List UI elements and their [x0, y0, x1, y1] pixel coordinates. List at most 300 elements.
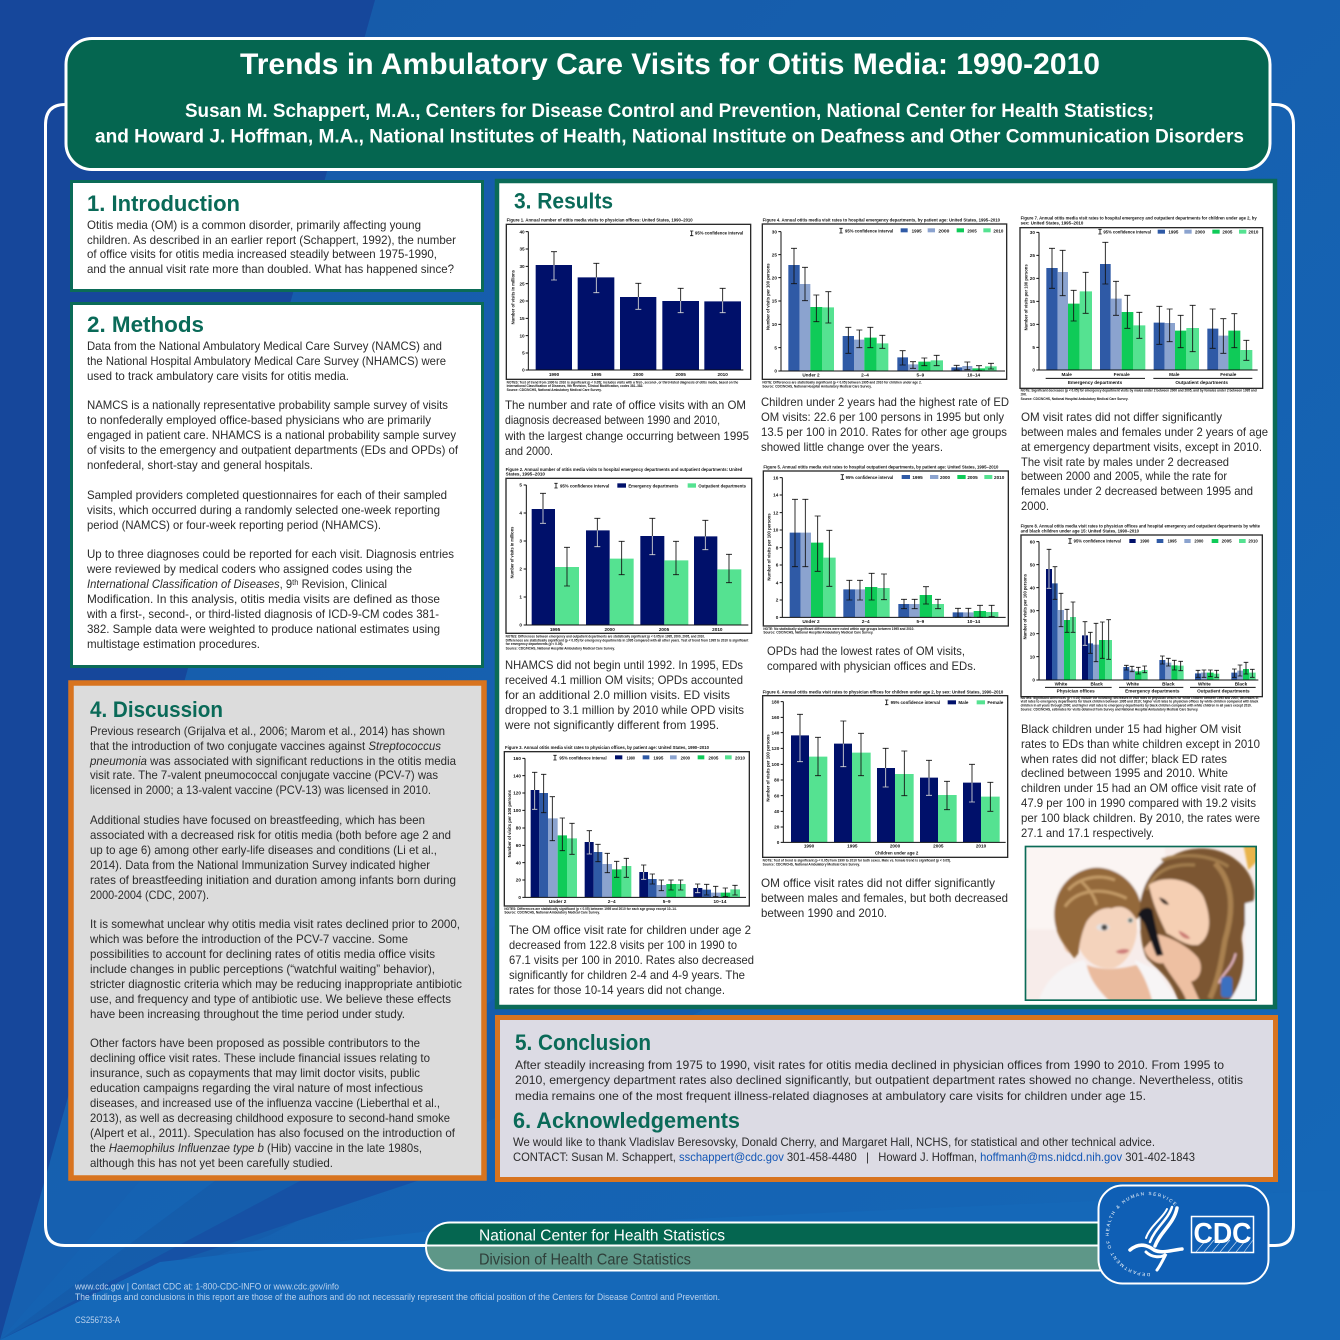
figure 8: rates by race and setting chart: White [1198, 681, 1211, 686]
panel: methods [72, 304, 482, 666]
text: discussion body: Previous research (Grijalva et al., 2006; Marom et al., 2014) has shown [90, 724, 445, 738]
text: figure 2 finding: were not significantly different from 1995. [504, 718, 719, 732]
figure 7: ED and OPD rates under 2 by sex chart: Number of visits per 100 persons [1023, 264, 1028, 330]
text: figure 7 finding: 2000. [1021, 499, 1049, 513]
figure 6: physician office rates by sex chart: Number of visits per 100 persons [766, 734, 771, 802]
figure 8: rates by race and setting chart: Outpatient departments [1197, 689, 1250, 694]
figure 2: ED and OPD visits bar chart [506, 467, 752, 650]
figure 4: emergency department rates by age chart: 0 [774, 369, 777, 374]
figure 7: ED and OPD rates under 2 by sex chart: Outpatient departments [1175, 380, 1228, 385]
text: figure 1 finding: The number and rate of office visits with an OM [505, 398, 746, 412]
figure 7: ED and OPD rates under 2 by sex chart: 30 [1030, 230, 1035, 235]
text: conclusion body [515, 1058, 1243, 1103]
figure 8: rates by race and setting chart: 0 [1032, 678, 1035, 683]
figure 6: physician office rates by sex chart: 20 [774, 825, 780, 830]
figure 5: outpatient department rates by age chart: 2 [776, 598, 779, 603]
figure 3: physician office rates by age chart: Under 2 [549, 899, 567, 904]
heading: conclusion: 5. Conclusion [515, 1030, 651, 1055]
figure 6: physician office rates by sex chart: 95% confidence interval [891, 700, 940, 705]
text: discussion body: diseases, and increased use of the influenza vaccine (Lieberthal et al., [90, 1096, 440, 1110]
text: discussion body: insurance, such as copayments that may limit doctor visits, public [90, 1066, 420, 1080]
figure 1: office visits bar chart: 2010 [717, 372, 728, 377]
footer text: www.cdc.gov | Contact CDC at: 1-800-CDC-INFO or www.cdc.gov/info [74, 1282, 339, 1292]
text: figure 5 finding: compared with physician offices and EDs. [767, 659, 976, 673]
text: figure 7 finding: females under 2 decreased between 1995 and [1021, 484, 1253, 498]
text: discussion body: use, and frequency and type of antibiotic use. We believe these effects [90, 992, 451, 1006]
figure 6: physician office rates by sex chart: 80 [774, 778, 780, 783]
figure 3: physician office rates by age chart: 40 [516, 860, 521, 865]
text: discussion body: rates of breastfeeding initiation and duration among infants born during [90, 873, 456, 887]
figure 6: physician office rates by sex chart: Children under age 2 [875, 851, 919, 856]
text: figure 2 finding: for an additional 2.0 million visits. ED visits [505, 688, 730, 702]
icon: HHS seal: DEPARTMENT OF HEALTH & HUMAN SERVICES USA [1106, 1192, 1177, 1276]
figure 7: ED and OPD rates under 2 by sex chart: Source: CDC/NCHS, National Hospital Ambulatory Medical Care Survey. [1021, 397, 1129, 401]
text: methods body: NAMCS is a nationally representative probability sample survey of visits [87, 398, 448, 412]
figure 7: ED and OPD rates under 2 by sex chart: 2000. [1021, 392, 1027, 396]
text: methods body: Up to three diagnoses could be reported for each visit. Diagnosis entries [87, 547, 454, 561]
text: methods body: with a first-, second-, or third-listed diagnosis of ICD-9-CM codes 381- [86, 607, 439, 621]
text: discussion body [89, 724, 462, 1170]
figure 1: office visits bar chart: 0 [522, 368, 525, 373]
figure 2: ED and OPD visits bar chart: 2000 [604, 627, 615, 632]
figure 7: ED and OPD rates under 2 by sex chart: NOTE: Significant decreases (p < 0.05) for emergency department visits by males under 2 between 2000 and 2005, and by females under 2 between 1995 and [1021, 389, 1257, 393]
figure 1: office visits bar chart: 5 [522, 351, 525, 356]
figure 8: rates by race and setting chart: 95% confidence interval [1074, 539, 1121, 544]
text: methods body: Revision, Clinical [298, 577, 387, 591]
figure 2: ED and OPD visits bar chart: States, 1995–2010 [506, 472, 545, 477]
text: methods body: Sampled providers completed questionnaires for each of their sampled [87, 488, 447, 502]
outer white outline [46, 104, 1294, 1246]
text: methods body: Modification. In this analysis, otitis media visits are defined as those [87, 592, 440, 606]
text: figure 8 finding [1020, 722, 1260, 840]
figure 3: physician office rates by age chart: 10–14 [714, 899, 727, 904]
text: introduction body: Otitis media (OM) is a common disorder, primarily affecting young [87, 218, 421, 232]
authors: and Howard J. Hoffman, M.A., National Institutes of Health, National Institute on Deafness and Other Communication Disorders [95, 126, 1244, 148]
text: figure 3 finding: significantly for children 2-4 and 4-9 years. The [509, 968, 745, 982]
figure 5: outpatient department rates by age chart: 14 [773, 493, 779, 498]
text: methods body: visits, which occurred during a randomly selected one-week reporting [87, 503, 440, 517]
text: methods body: 382. Sample data were weighted to produce national estimates using [87, 622, 440, 636]
figure 8: rates by race and setting chart: Figure 8. Annual otitis media visit rates to physician offices and hospital emergency and outpatient departments by white [1021, 524, 1260, 529]
figure 2: ED and OPD visits bar chart: Number of visits in millions [509, 526, 514, 578]
authors [95, 100, 1244, 148]
text: conclusion body: After steadily increasing from 1975 to 1990, visit rates for otitis media declined in physician offices from 1990 to 2010. From 1995 to [515, 1058, 1224, 1072]
text: discussion body: education campaigns regarding the viral nature of most infectious [90, 1081, 423, 1095]
text: figure 8 finding: rates to EDs than white children except in 2010 [1021, 737, 1260, 751]
figure 7: ED and OPD rates under 2 by sex chart: 95% confidence interval [1103, 230, 1151, 235]
figure 5: outpatient department rates by age chart: Figure 5. Annual otitis media visit rates to hospital outpatient departments, by patient age: United States, 1995–2010 [763, 465, 999, 470]
figure 3: physician office rates by age chart: 140 [513, 773, 521, 778]
text: figure 6 finding: between males and females, but both decreased [761, 891, 1008, 905]
text: methods body: to nonfederally employed office-based physicians who are primarily [87, 413, 431, 427]
text: figure 7 finding: The visit rate by males under 2 decreased [1021, 455, 1229, 469]
figure 6: physician office rates by sex chart: 120 [772, 746, 780, 751]
figure 1: office visits bar chart: 25 [519, 281, 525, 286]
figure 4: emergency department rates by age chart: 20 [772, 275, 777, 280]
figure 4: emergency department rates by age chart: 1995 [912, 228, 922, 233]
figure 1: office visits bar chart: International Classification of Diseases, 9th Revision, Clinical Modification, codes 381–382. [507, 384, 643, 388]
figure 8: rates by race and setting chart: 30 [1030, 608, 1035, 613]
figure 8: rates by race and setting chart: 2000 [1194, 539, 1204, 544]
figure 5: outpatient department rates by age chart: 12 [773, 510, 779, 515]
figure 8: rates by race and setting chart: Physician offices [1057, 689, 1095, 694]
figure 6: physician office rates by sex chart: Male [958, 700, 969, 705]
figure 3: physician office rates by age chart: Source: CDC/NCHS, National Ambulatory Medical Care Survey. [504, 911, 600, 915]
figure 1: office visits bar chart: 20 [519, 299, 525, 304]
text: conclusion body: media remains one of the most frequent illness-related diagnoses at ambulatory care visits for children under age 15. [515, 1089, 1146, 1103]
text: figure 1 finding [504, 398, 749, 458]
figure 8: rates by race and setting chart: 20 [1030, 631, 1035, 636]
text: methods body: engaged in patient care. NHAMCS is a national probability sample survey [87, 428, 456, 442]
header banner [66, 38, 1270, 170]
figure 3: physician office rates by age chart: 80 [516, 826, 521, 831]
figure 4: emergency department rates by age chart: 95% confidence interval [845, 228, 893, 233]
figure 8: rates by race and setting chart: White [1055, 681, 1068, 686]
figure 7: ED and OPD rates under 2 by sex chart: sex: United States, 1995–2010 [1021, 221, 1084, 226]
figure 6: physician office rates by sex chart: 40 [774, 809, 780, 814]
figure 5: outpatient department rates by age chart: 16 [773, 475, 779, 480]
text: methods body: period (NAMCS) or four-week reporting period (NHAMCS). [87, 518, 381, 532]
figure 8: rates by race and setting chart: and black children under age 15: United States, 1990–2010 [1021, 529, 1139, 534]
figure 5: outpatient department rates by age chart: Source: CDC/NCHS, National Hospital Ambulatory Medical Care Survey. [763, 631, 874, 635]
footer text: CS256733-A [75, 1315, 121, 1325]
figure 1: office visits bar chart: Number of visits in millions [511, 270, 516, 324]
figure 6: physician office rates by sex chart: Female [987, 700, 1004, 705]
figure 8: rates by race and setting chart [1021, 524, 1262, 712]
figure 6: physician office rates by sex chart: 100 [772, 762, 780, 767]
figure 3: physician office rates by age chart: 60 [516, 843, 521, 848]
text: figure 3 finding: 67.1 visits per 100 in 2010. Rates also decreased [509, 953, 754, 967]
figure 4: emergency department rates by age chart: 25 [772, 252, 777, 257]
figure 7: ED and OPD rates under 2 by sex chart: Female [1220, 372, 1237, 377]
panel: results [497, 181, 1275, 1007]
figure 5: outpatient department rates by age chart [763, 465, 1008, 635]
heading: discussion: 4. Discussion [90, 697, 223, 722]
text: discussion body: associated with a decreased risk for otitis media (both before age 2 and [90, 828, 451, 842]
figure 8: rates by race and setting chart: White [1126, 681, 1139, 686]
text: discussion body: It is somewhat unclear why otitis media visit rates declined prior to 2000, [90, 917, 460, 931]
figure 7: ED and OPD rates under 2 by sex chart: 0 [1032, 368, 1035, 373]
figure 3: physician office rates by age chart [504, 745, 749, 915]
figure 2: ED and OPD visits bar chart: 2010 [712, 627, 723, 632]
text: figure 2 finding [504, 658, 744, 732]
figure 8: rates by race and setting chart: Black [1090, 681, 1103, 686]
text: figure 4 finding [761, 395, 1009, 454]
figure 5: outpatient department rates by age chart: Number of visits per 100 persons [767, 513, 772, 581]
text: introduction body: and the annual visit rate more than doubled. What has happened since? [87, 262, 454, 276]
figure 3: physician office rates by age chart: 0 [518, 895, 521, 900]
figure 3: physician office rates by age chart: NOTES: Differences are statistically significant (p < 0.05) between 1995 and 2010 for each age group except 10–14. [504, 907, 677, 911]
figure 7: ED and OPD rates under 2 by sex chart: Female [1114, 372, 1130, 377]
panel: conclusion and acknowledgements [498, 1018, 1276, 1180]
text: figure 7 finding: OM visit rates did not differ significantly [1021, 410, 1222, 424]
figure 6: physician office rates by sex chart: 180 [772, 699, 780, 704]
figure 8: rates by race and setting chart: NOTES: Significant differences (p < 0.05) include the following: decreases in visit rates to physician offices for white children between 1995 and 2000; decreases in [1021, 696, 1258, 700]
text: discussion body: the Haemophilus Influenzae type b (Hib) vaccine in the late 1980s, [90, 1141, 422, 1155]
figure 8: rates by race and setting chart: 1990 [1140, 539, 1150, 544]
figure 4: emergency department rates by age chart: 2000 [938, 228, 950, 233]
text: methods body: multistage estimation procedures. [87, 637, 260, 651]
figure 5: outpatient department rates by age chart: 8 [776, 545, 779, 550]
text: acknowledgements and contact: CONTACT: Susan M. Schappert, sschappert@cdc.gov 301-458-4480 | Howard J. Hoffman, hoffmanh@ms.nidcd.nih.gov 301-402-1843 [513, 1150, 1195, 1164]
figure 2: ED and OPD visits bar chart: NOTES: Differences between emergency and outpatient departments are statistically significant (p < 0.05) in 1995, 2000, 2005, and 2010. [506, 635, 705, 639]
text: figure 2 finding: received 4.1 million OM visits; OPDs accounted [505, 673, 743, 687]
text: discussion body: declining office visit rates. These include financial issues relating to [90, 1051, 430, 1065]
figure 4: emergency department rates by age chart: 10 [772, 322, 777, 327]
text: discussion body: Additional studies have focused on breastfeeding, which has been [90, 813, 425, 827]
heading: introduction: 1. Introduction [87, 191, 240, 216]
figure 3: physician office rates by age chart: 2005 [708, 755, 719, 760]
figure 1: office visits bar chart: 15 [519, 316, 525, 321]
figure 5: outpatient department rates by age chart: 95% confidence interval [846, 475, 893, 480]
text: acknowledgements and contact [513, 1135, 1195, 1164]
figure 5: outpatient department rates by age chart: 4 [776, 580, 779, 585]
figure 2: ED and OPD visits bar chart: 4 [519, 511, 522, 516]
figure 3: physician office rates by age chart: 1990 [627, 755, 635, 760]
figure 5: outpatient department rates by age chart: 2000 [940, 475, 950, 480]
footer text [74, 1282, 720, 1325]
figure 8: rates by race and setting chart: Black [1235, 681, 1248, 686]
figure 3: physician office rates by age chart: 160 [513, 756, 521, 761]
text: methods body [86, 339, 459, 651]
text: methods body: Data from the National Ambulatory Medical Care Survey (NAMCS) and [87, 339, 442, 353]
figure 1: office visits bar chart: 2005 [675, 372, 686, 377]
text: discussion body: up to age 6) among other early-life diseases and conditions (Li et al., [90, 843, 437, 857]
figure 4: emergency department rates by age chart: NOTE: Differences are statistically significant (p < 0.05) between 1995 and 2010 for children under age 2. [762, 380, 922, 384]
text: figure 3 finding: rates for those 10-14 years did not change. [509, 983, 725, 997]
figure 3: physician office rates by age chart: 100 [513, 808, 521, 813]
figure 5: outpatient department rates by age chart: 2010 [994, 475, 1005, 480]
figure 1: office visits bar chart [506, 218, 751, 392]
figure 1: office visits bar chart: 10 [519, 333, 525, 338]
figure 4: emergency department rates by age chart: Under 2 [802, 372, 820, 377]
figure 4: emergency department rates by age chart: 10–14 [967, 372, 981, 377]
figure 8: rates by race and setting chart: 2010 [1248, 539, 1258, 544]
figure 4: emergency department rates by age chart: 2–4 [861, 372, 869, 377]
figure 3: physician office rates by age chart: 120 [513, 791, 521, 796]
figure 3: physician office rates by age chart: 2010 [735, 755, 745, 760]
figure 2: ED and OPD visits bar chart: 0 [519, 623, 522, 628]
authors: Susan M. Schappert, M.A., Centers for Disease Control and Prevention, National Center for Health Statistics; [185, 100, 1154, 122]
text: discussion body: 2014). Data from the National Immunization Survey indicated higher [90, 858, 430, 872]
figure 6: physician office rates by sex chart: 140 [772, 730, 780, 735]
text: methods body: used to track ambulatory care visits for otitis media. [87, 369, 349, 383]
figure 5: outpatient department rates by age chart: 6 [776, 563, 779, 568]
figure 8: rates by race and setting chart: visit rates to emergency departments for black children between 1995 and 2010; higher visit rates to physician offices by white children compared with black [1021, 700, 1259, 704]
text: figure 8 finding: declined between 1995 and 2010. White [1021, 766, 1228, 780]
figure 1: office visits bar chart: 1995 [591, 372, 602, 377]
text: figure 8 finding: 47.9 per 100 in 1990 compared with 19.2 visits [1021, 796, 1256, 810]
text: discussion body: 2013), as well as decreasing childhood exposure to second-hand smoke [90, 1111, 450, 1125]
figure 2: ED and OPD visits bar chart: 2 [519, 567, 522, 572]
figure 4: emergency department rates by age chart: 5 [774, 345, 777, 350]
text: discussion body: 2000-2004 (CDC, 2007). [90, 888, 209, 902]
figure 2: ED and OPD visits bar chart: Differences are statistically significant (p < 0.05) for emergency departments in 1995 compared with all other years. Test of trend from 1995 to 2010 is significant [506, 638, 749, 642]
figure 1: office visits bar chart: 95% confidence interval [695, 230, 743, 235]
figure 6: physician office rates by sex chart: 2005 [933, 844, 944, 849]
text: figure 3 finding [509, 923, 754, 997]
figure 6: physician office rates by sex chart [763, 689, 1008, 866]
text: figure 7 finding: at emergency department visits, except in 2010. [1021, 440, 1262, 454]
figure 5: outpatient department rates by age chart: 1995 [912, 475, 923, 480]
figure 7: ED and OPD rates under 2 by sex chart: 2000 [1195, 230, 1205, 235]
text: methods body: of visits to the emergency and outpatient departments (EDs and OPDs) of [87, 443, 459, 457]
figure 1: office visits bar chart: 30 [519, 264, 525, 269]
text: figure 4 finding: 13.5 per 100 in 2010. Rates for other age groups [761, 425, 1007, 439]
figure 2: ED and OPD visits bar chart: Outpatient departments [698, 483, 746, 488]
photo: doctor examining child's ear [1025, 845, 1258, 1002]
figure 7: ED and OPD rates under 2 by sex chart: Male [1061, 372, 1072, 377]
figure 8: rates by race and setting chart: 50 [1030, 562, 1035, 567]
text: methods body: International Classification of Diseases, 9 [87, 577, 293, 591]
text: figure 6 finding [761, 876, 1008, 920]
title: Trends in Ambulatory Care Visits for Otitis Media: 1990-2010 [240, 48, 1100, 81]
text: discussion body: visit rate. The 7-valent pneumococcal conjugate vaccine (PCV-7) was [90, 768, 438, 782]
text: discussion body: licensed in 2000; a 13-valent vaccine (PCV-13) was licensed in 2010. [90, 783, 431, 797]
figure 6: physician office rates by sex chart: 160 [772, 715, 780, 720]
figure 2: ED and OPD visits bar chart: Figure 2. Annual number of otitis media visits to hospital emergency departments and outpatient departments: United [506, 467, 742, 472]
text: figure 2 finding: NHAMCS did not begin until 1992. In 1995, EDs [505, 658, 743, 672]
text: figure 8 finding: when rates did not differ; black ED rates [1020, 752, 1227, 766]
text: figure 6 finding: OM office visit rates did not differ significantly [761, 876, 995, 890]
panel: discussion [71, 683, 484, 1178]
figure 6: physician office rates by sex chart: 2000 [890, 844, 901, 849]
text: discussion body: which was before the introduction of the PCV-7 vaccine. Some [89, 932, 408, 946]
figure 4: emergency department rates by age chart: 30 [772, 229, 777, 234]
text: methods body: th [292, 578, 298, 587]
figure 6: physician office rates by sex chart: 2010 [976, 844, 987, 849]
text: center name: National Center for Health Statistics [479, 1228, 725, 1244]
text: figure 1 finding: with the largest change occurring between 1995 [504, 429, 749, 443]
figure 7: ED and OPD rates under 2 by sex chart: 15 [1030, 299, 1035, 304]
pill: agency names [426, 1222, 1120, 1270]
heading: methods: 2. Methods [87, 312, 204, 337]
figure 4: emergency department rates by age chart: Source: CDC/NCHS, National Hospital Ambulatory Medical Care Survey. [762, 384, 872, 388]
heading: acknowledgements: 6. Acknowledgements [513, 1108, 740, 1133]
figure 2: ED and OPD visits bar chart: Source: CDC/NCHS, National Hospital Ambulatory Medical Care Survey. [506, 646, 615, 650]
text: figure 3 finding: decreased from 122.8 visits per 100 in 1990 to [509, 938, 737, 952]
text: methods body: were reviewed by medical coders who assigned codes using the [86, 562, 412, 576]
figure 3: physician office rates by age chart: 1995 [653, 755, 664, 760]
figure 6: physician office rates by sex chart: Source: CDC/NCHS, National Ambulatory Medical Care Survey. [763, 862, 860, 866]
figure 4: emergency department rates by age chart: Figure 4. Annual otitis media visit rates to hospital emergency departments, by patient age: United States, 1995–2010 [763, 218, 1000, 223]
figure 7: ED and OPD rates under 2 by sex chart: 10 [1030, 322, 1035, 327]
figure 4: emergency department rates by age chart: 2010 [993, 228, 1004, 233]
text: figure 8 finding: per 100 black children. By 2010, the rates were [1021, 811, 1260, 825]
figure 8: rates by race and setting chart: 1995 [1168, 539, 1177, 544]
figure 4: emergency department rates by age chart: 2005 [967, 228, 977, 233]
figure 8: rates by race and setting chart: Source: CDC/NCHS, estimates for visits obtained from Survey and National Hospital Ambulatory Medical Care Survey. [1021, 708, 1199, 712]
text: discussion body: include changes in public perceptions (“watchful waiting” behavior), [90, 962, 435, 976]
panel: introduction [72, 182, 482, 290]
figure 4: emergency department rates by age chart: 15 [772, 299, 777, 304]
figure 8: rates by race and setting chart: Emergency departments [1125, 689, 1180, 694]
text: discussion body: that the introduction of two conjugate vaccines against Streptococcus [90, 739, 441, 753]
figure 7: ED and OPD rates under 2 by sex chart: 5 [1032, 345, 1035, 350]
text: figure 4 finding: Children under 2 years had the highest rate of ED [761, 395, 1009, 409]
figure 2: ED and OPD visits bar chart: 5 [519, 483, 522, 488]
figure 7: ED and OPD rates under 2 by sex chart: 25 [1030, 253, 1035, 258]
figure 1: office visits bar chart: NOTES: Test of trend from 1990 to 2010 is significant (p < 0.05); includes visits with a first-, second-, or third-listed diagnosis of otitis media, based on the [507, 380, 738, 384]
figure 2: ED and OPD visits bar chart: 1 [519, 595, 522, 600]
figure 1: office visits bar chart: Source: CDC/NCHS, National Ambulatory Medical Care Survey. [507, 388, 602, 392]
figure 2: ED and OPD visits bar chart: 95% confidence interval [560, 483, 609, 488]
text: discussion body: pneumonia was associated with significant reductions in the otitis media [89, 754, 456, 768]
text: figure 7 finding: between males and females under 2 years of age [1021, 425, 1268, 439]
figure 2: ED and OPD visits bar chart: for emergency departments (p < 0.05). [506, 642, 563, 646]
figure 5: outpatient department rates by age chart: 2005 [967, 475, 978, 480]
figure 8: rates by race and setting chart: 40 [1030, 585, 1035, 590]
figure 2: ED and OPD visits bar chart: 2005 [659, 627, 670, 632]
icon: CDC wordmark: CDC [1194, 1218, 1252, 1250]
text: discussion body: (Alpert et al., 2011). Speculation has also focused on the introduction of [90, 1126, 456, 1140]
figure 8: rates by race and setting chart: 60 [1030, 539, 1035, 544]
text: discussion body: although this has not yet been carefully studied. [90, 1156, 333, 1170]
figure 2: ED and OPD visits bar chart: Emergency departments [628, 483, 679, 488]
text: conclusion body: 2010, emergency department rates also declined significantly, but outpatient department rates showed no change. Nevertheless, otitis [515, 1073, 1243, 1087]
figure 5: outpatient department rates by age chart: 0 [776, 615, 779, 620]
figure 6: physician office rates by sex chart: 1995 [847, 844, 858, 849]
figure 6: physician office rates by sex chart: 1990 [804, 844, 815, 849]
figure 5: outpatient department rates by age chart: 5–9 [916, 619, 925, 624]
figure 3: physician office rates by age chart: 2000 [681, 755, 690, 760]
figure 5: outpatient department rates by age chart: 2–4 [862, 619, 870, 624]
figure 3: physician office rates by age chart: 95% confidence interval [559, 755, 607, 760]
figure 5: outpatient department rates by age chart: 10 [773, 528, 779, 533]
text: figure 1 finding: and 2000. [505, 444, 553, 458]
text: figure 1 finding: diagnosis decreased between 1990 and 2010, [505, 413, 720, 427]
text: figure 6 finding: between 1990 and 2010. [761, 906, 887, 920]
figure 2: ED and OPD visits bar chart: 3 [519, 539, 522, 544]
figure 1: office visits bar chart: 2000 [633, 372, 644, 377]
figure 4: emergency department rates by age chart: 5–9 [916, 372, 925, 377]
figure 7: ED and OPD rates under 2 by sex chart: Emergency departments [1068, 380, 1123, 385]
text: division name: Division of Health Care Statistics [479, 1252, 691, 1268]
figure 5: outpatient department rates by age chart: 10–14 [967, 619, 981, 624]
figure 3: physician office rates by age chart: Number of visits per 100 persons [507, 790, 512, 857]
figure 3: physician office rates by age chart: 2–4 [608, 899, 616, 904]
text: introduction body: children. As described in an earlier report (Schappert, 1992), the number [87, 233, 456, 247]
text: figure 8 finding: children under 15 had an OM office visit rate of [1021, 781, 1257, 795]
text: figure 8 finding: 27.1 and 17.1 respectively. [1021, 826, 1154, 840]
figure 8: rates by race and setting chart: children in all years through 2000; and higher visit rates to emergency departments by black children compared with white children in all years except 2010. [1021, 704, 1252, 708]
heading: results: 3. Results [514, 188, 613, 214]
figure 1: office visits bar chart: 40 [519, 229, 525, 234]
figure 2: ED and OPD visits bar chart: 1995 [550, 627, 561, 632]
figure 7: ED and OPD rates under 2 by sex chart: Figure 7. Annual otitis media visit rates to hospital emergency and outpatient departments for children under age 2, by [1021, 216, 1257, 221]
text: figure 5 finding: OPDs had the lowest rates of OM visits, [767, 644, 965, 658]
text: figure 7 finding: between 2000 and 2005, while the rate for [1021, 469, 1227, 483]
text: figure 7 finding [1021, 410, 1268, 513]
text: introduction body: of office visits for otitis media increased steadily between 1975-1990, [87, 247, 437, 261]
figure 3: physician office rates by age chart: Figure 3. Annual otitis media visit rates to physician offices, by patient age: United States, 1990–2010 [505, 745, 709, 750]
text: discussion body: Other factors have been proposed as possible contributors to the [90, 1036, 420, 1050]
text: figure 3 finding: The OM office visit rate for children under age 2 [509, 923, 751, 937]
figure 3: physician office rates by age chart: 5–9 [663, 899, 671, 904]
text: figure 5 finding [767, 644, 976, 673]
text: figure 4 finding: OM visits: 22.6 per 100 persons in 1995 but only [761, 410, 1004, 424]
figure 6: physician office rates by sex chart: 60 [774, 793, 780, 798]
figure 4: emergency department rates by age chart: Number of visits per 100 persons [766, 263, 771, 330]
text: discussion body: have been increasing throughout the time period under study. [90, 1007, 405, 1021]
figure 5: outpatient department rates by age chart: NOTE: No statistically significant differences were noted within age groups between 1995 and 2010. [763, 627, 914, 631]
text: discussion body: possibilities to account for declining rates of otitis media office visits [90, 947, 435, 961]
text: figure 4 finding: showed little change over the years. [761, 440, 943, 454]
figure 7: ED and OPD rates under 2 by sex chart: 1995 [1168, 230, 1179, 235]
figure 8: rates by race and setting chart: 10 [1030, 654, 1035, 659]
text: figure 8 finding: Black children under 15 had higher OM visit [1021, 722, 1242, 736]
figure 5: outpatient department rates by age chart: Under 2 [802, 619, 820, 624]
